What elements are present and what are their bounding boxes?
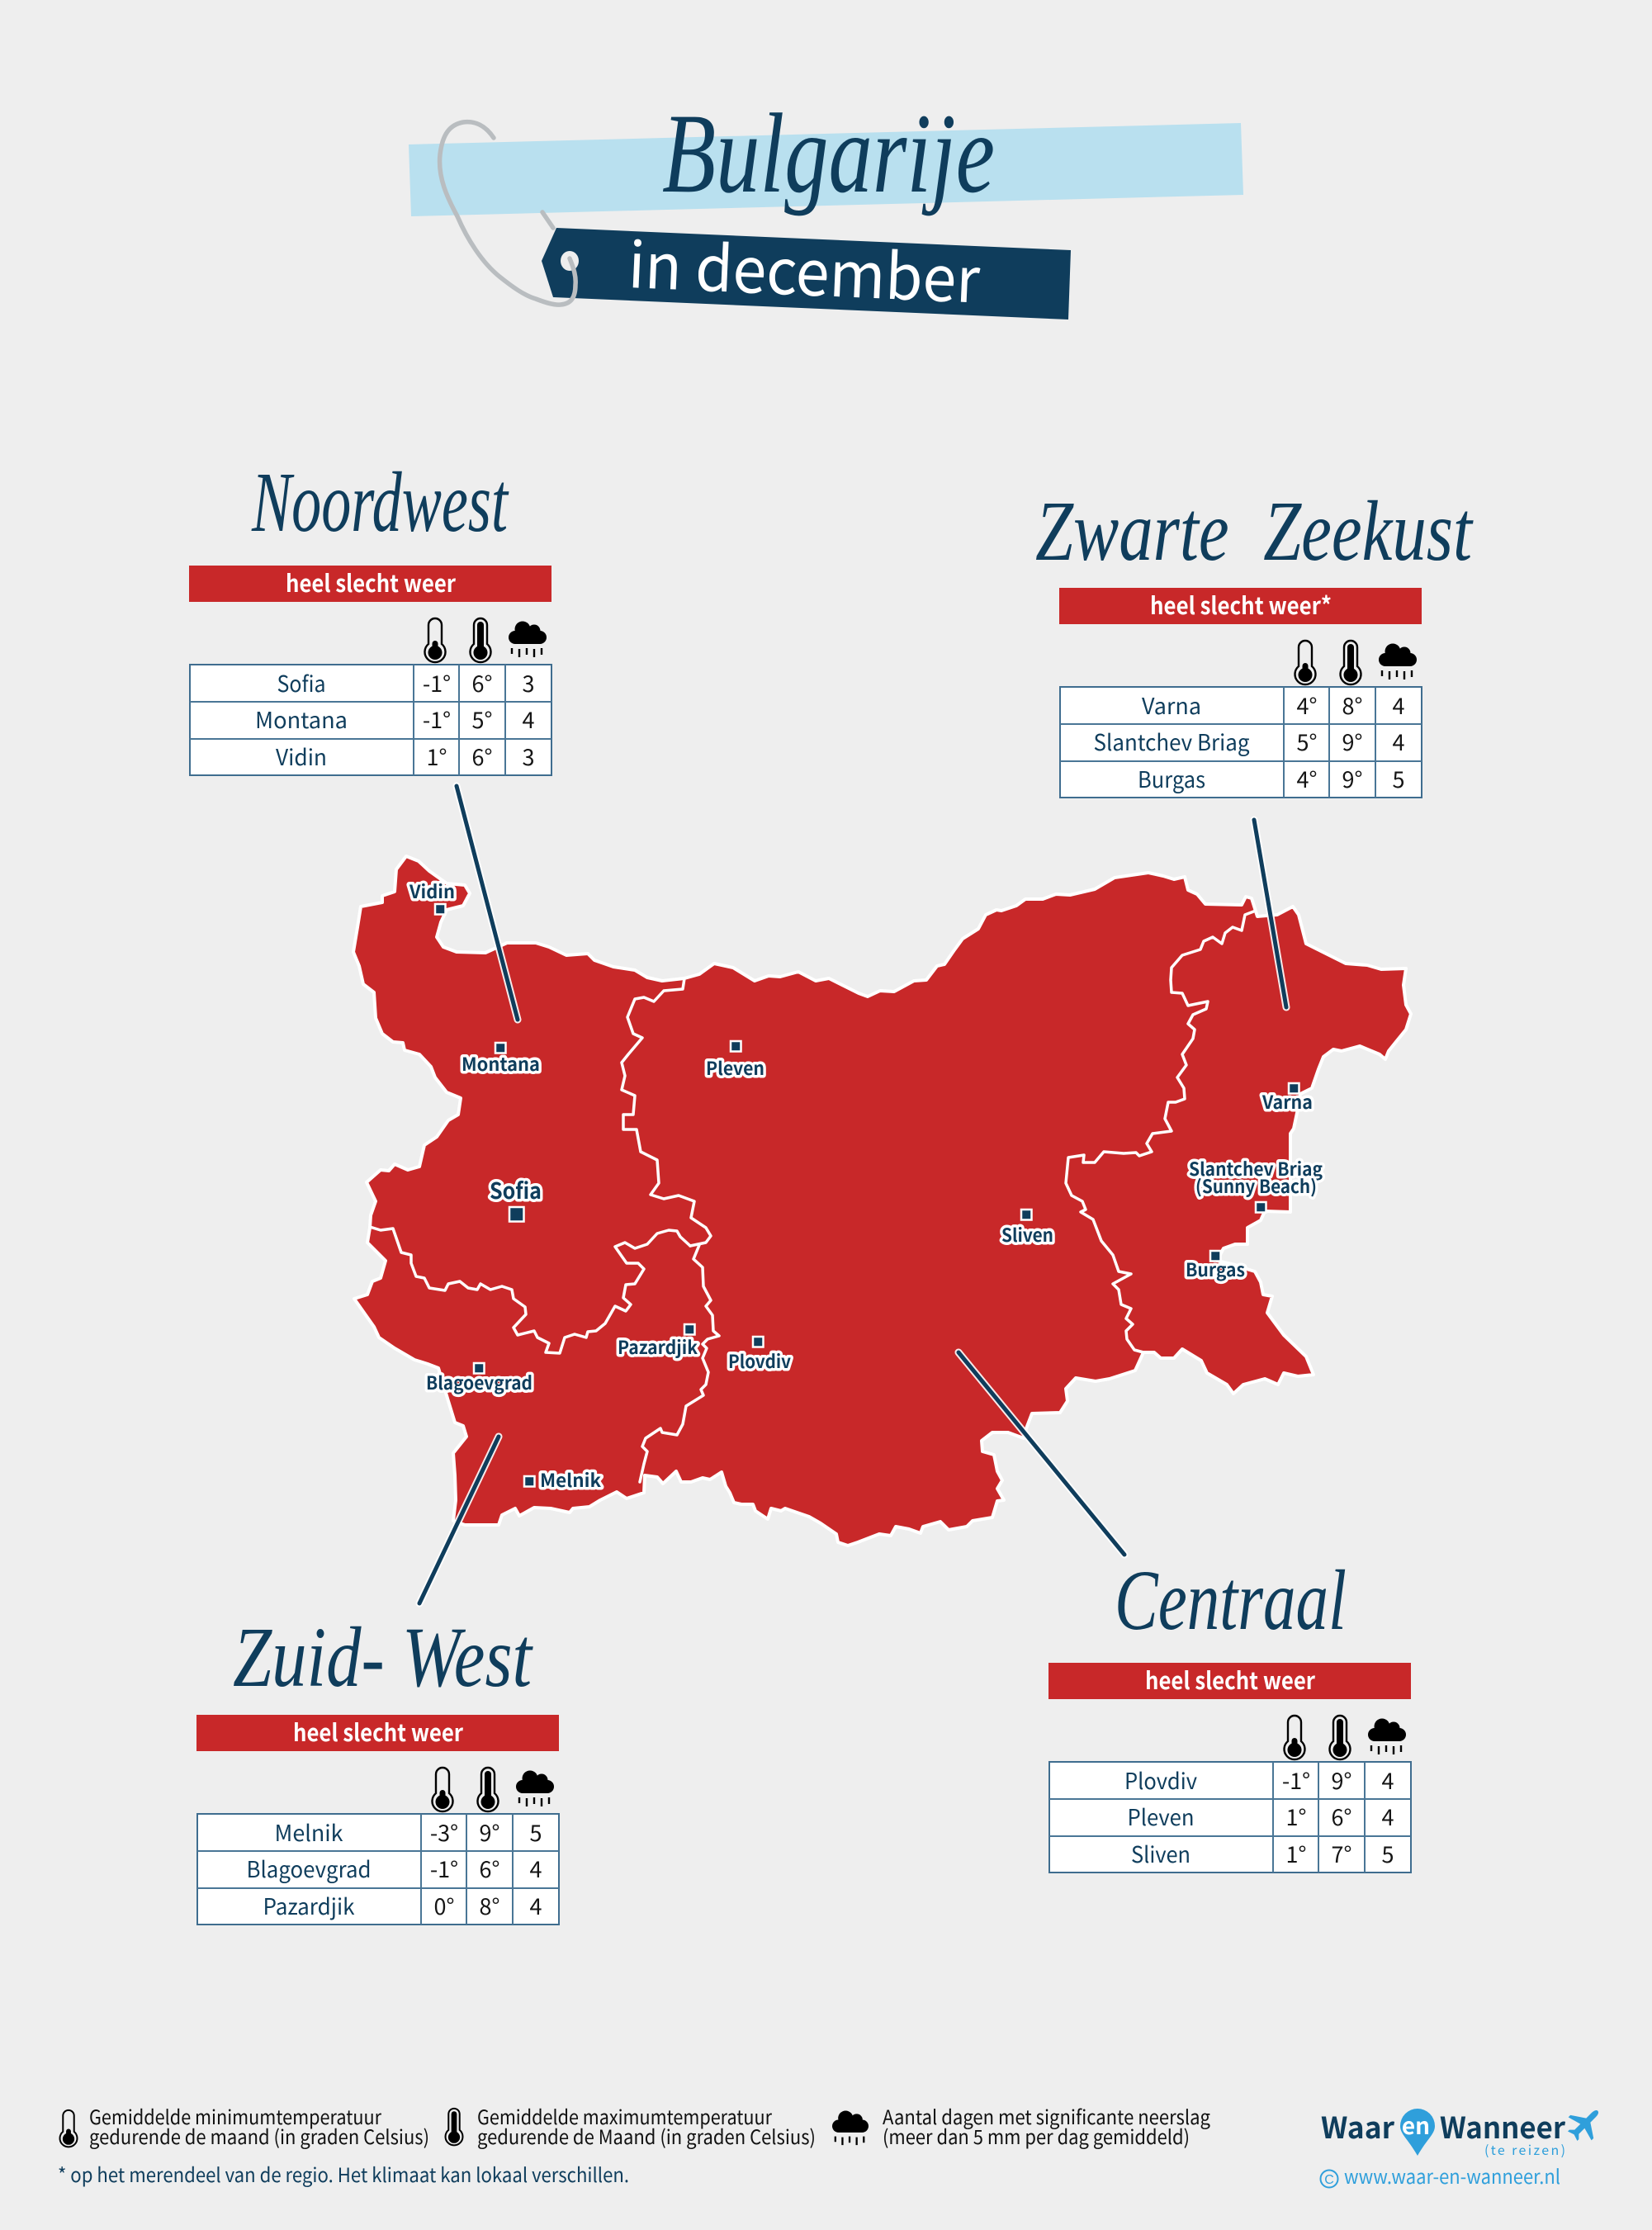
title block (409, 90, 1243, 321)
copyright symbol: C (1324, 2173, 1334, 2187)
luggage tag (542, 228, 1071, 320)
website: www.waar-en-wanneer.nl (1344, 2161, 1560, 2190)
legend: minimum temperature (60, 2101, 429, 2150)
table (190, 665, 551, 775)
icon: minimum temperature (424, 618, 446, 662)
table: Sliven (1131, 1837, 1190, 1869)
weather bar (189, 565, 551, 602)
table: Sofia (277, 666, 325, 698)
table: 4 (530, 1889, 542, 1921)
table: Varna (1142, 689, 1201, 721)
city: Sofia: Sofia (490, 1173, 542, 1205)
tag string (440, 122, 575, 305)
heading: Centraal: Centraal (1115, 1553, 1347, 1648)
table: Melnik (274, 1816, 343, 1848)
legend: precipitation (832, 2101, 1210, 2150)
table: 6° (1332, 1800, 1351, 1832)
icon: maximum temperature (1329, 1716, 1351, 1759)
table: 4 (1392, 725, 1405, 757)
city: Melnik: Melnik (540, 1466, 602, 1493)
icon: minimum temperature (433, 1768, 452, 1811)
table: Pleven (1128, 1800, 1194, 1832)
panel: Zuid-West (196, 1610, 559, 1925)
weather bar (1059, 587, 1422, 624)
table: 9° (1342, 725, 1362, 757)
table: -3° (430, 1816, 458, 1848)
tag hole (561, 251, 579, 271)
region border: Noordwest / Centraal (622, 978, 711, 1246)
table: Montana (255, 703, 348, 735)
table: 7° (1332, 1837, 1351, 1869)
table: 9° (1342, 762, 1362, 794)
table: 4 (530, 1852, 542, 1884)
table: 6° (472, 740, 492, 772)
footnote: * op het merendeel van de regio. Het klimaat kan lokaal verschillen. (58, 2159, 629, 2188)
city: Pleven: Pleven (706, 1054, 764, 1081)
wordmark: Wanneer: Wanneer (1440, 2105, 1565, 2147)
tagline: te reizen: (te reizen) (1484, 2139, 1565, 2159)
legend: precipitation: Aantal dagen met significante neerslag (883, 2101, 1210, 2130)
table: Vidin (276, 740, 327, 772)
table: 3 (522, 740, 535, 772)
legend: maximum temperature: Gemiddelde maximumtemperatuur (477, 2101, 773, 2130)
subtitle: in december: in december (627, 215, 982, 321)
table: 4° (1297, 689, 1317, 721)
copyright symbol (1321, 2170, 1337, 2188)
weather bar: heel slecht weer (286, 565, 456, 599)
table: Plovdiv (1124, 1764, 1197, 1796)
region border: Noordwest / Zuid-West (370, 1227, 690, 1353)
connector: Centraal (959, 1352, 1124, 1555)
icon: map pin (1400, 2109, 1435, 2156)
table: Blagoevgrad (246, 1852, 372, 1884)
table: 1° (1286, 1800, 1306, 1832)
panel: Centraal (1048, 1553, 1411, 1873)
city: Vidin: Vidin (409, 878, 455, 904)
table: 5 (1382, 1837, 1394, 1869)
table: Pazardjik (263, 1889, 355, 1921)
weather bar: heel slecht weer (293, 1714, 463, 1749)
weather bar (1048, 1662, 1411, 1699)
heading: Zwarte Zeekust: Zwarte Zeekust (1035, 484, 1474, 579)
table (1060, 687, 1422, 798)
legend (60, 2101, 1210, 2150)
city: Sliven: Sliven (1001, 1221, 1053, 1248)
table: 1° (427, 740, 447, 772)
city: Plovdiv: Plovdiv (728, 1347, 791, 1374)
city: Sofia (490, 1173, 542, 1222)
table: -1° (423, 666, 451, 698)
city: Pleven (706, 1041, 764, 1081)
icon: minimum temperature (1285, 1716, 1304, 1759)
pin text: en: en (1402, 2109, 1430, 2142)
table: 4 (1392, 689, 1405, 721)
table: -1° (430, 1852, 458, 1884)
icon: rain (516, 1770, 554, 1806)
table: 8° (480, 1889, 499, 1921)
table: 9° (480, 1816, 499, 1848)
table: 5° (1297, 725, 1317, 757)
table (197, 1814, 559, 1925)
heading: Noordwest: Noordwest (251, 455, 509, 550)
table: -1° (1282, 1764, 1310, 1796)
table: 9° (1332, 1764, 1351, 1796)
city: Slantchev Briag: Slantchev Briag (1189, 1155, 1323, 1181)
table: 6° (480, 1852, 499, 1884)
icon: maximum temperature (477, 1768, 499, 1811)
city: Sliven (1001, 1210, 1053, 1248)
city: Plovdiv (728, 1337, 791, 1374)
icon: minimum temperature (1295, 641, 1316, 684)
map of Bulgaria (353, 856, 1411, 1546)
region border: Centraal / Zwarte Zeekust (1066, 911, 1256, 1352)
table: Slantchev Briag (1093, 725, 1250, 757)
icon: maximum temperature (471, 618, 490, 662)
panel: Noordwest (189, 455, 551, 775)
icon: plane (1561, 2100, 1609, 2147)
table: 5 (530, 1816, 542, 1848)
title banner: light blue (409, 123, 1243, 216)
city: Varna: Varna (1261, 1088, 1313, 1115)
city: Blagoevgrad: Blagoevgrad (426, 1369, 533, 1395)
table (1049, 1762, 1411, 1873)
table: 3 (522, 666, 535, 698)
logo: Waar en Wanneer (1321, 2100, 1609, 2190)
city: Slantchev Briag (1189, 1155, 1323, 1212)
city: Pazardjik: Pazardjik (618, 1333, 698, 1360)
heading: Zuid-West: Zuid- West (233, 1610, 533, 1705)
country shape (353, 856, 1411, 1546)
city markers and labels (409, 878, 1323, 1493)
weather bar (196, 1714, 559, 1751)
region border: Centraal / Zuid-West (640, 1245, 719, 1482)
icon: rain (509, 621, 547, 657)
icon: maximum temperature (1341, 641, 1361, 684)
table: 5 (1392, 762, 1405, 794)
table: -1° (423, 703, 451, 735)
table: 4 (522, 703, 535, 735)
legend: maximum temperature (446, 2101, 816, 2150)
city: Burgas: Burgas (1186, 1256, 1245, 1282)
legend: minimum temperature: gedurende de maand (in graden Celsius) (89, 2121, 429, 2150)
legend: minimum temperature: Gemiddelde minimumtemperatuur (89, 2101, 382, 2130)
city: Montana: Montana (462, 1050, 540, 1077)
connector: Zuid-West (419, 1437, 499, 1603)
weather bar: heel slecht weer (1145, 1662, 1315, 1697)
table: 4 (1382, 1764, 1394, 1796)
panel: Zwarte Zeekust (1035, 484, 1474, 798)
table: 8° (1342, 689, 1362, 721)
icon: rain (1368, 1719, 1406, 1754)
table: 4 (1382, 1800, 1394, 1832)
wordmark: Waar: Waar (1321, 2105, 1394, 2147)
table: 4° (1297, 762, 1317, 794)
legend: maximum temperature: gedurende de Maand (in graden Celsius) (477, 2121, 816, 2150)
city: Slantchev Briag: (Sunny Beach) (1195, 1172, 1317, 1199)
table: Burgas (1138, 762, 1205, 794)
table: 0° (434, 1889, 454, 1921)
connector: Noordwest (457, 786, 518, 1020)
connector: Zwarte Zeekust (1254, 820, 1286, 1007)
icon: rain (1379, 644, 1417, 679)
table: 6° (472, 666, 492, 698)
weather bar: heel slecht weer* (1150, 587, 1332, 622)
table: 1° (1286, 1837, 1306, 1869)
table: 5° (472, 703, 492, 735)
title: Bulgarije: Bulgarije (662, 90, 995, 216)
legend: precipitation: (meer dan 5 mm per dag gemiddeld) (883, 2121, 1190, 2150)
